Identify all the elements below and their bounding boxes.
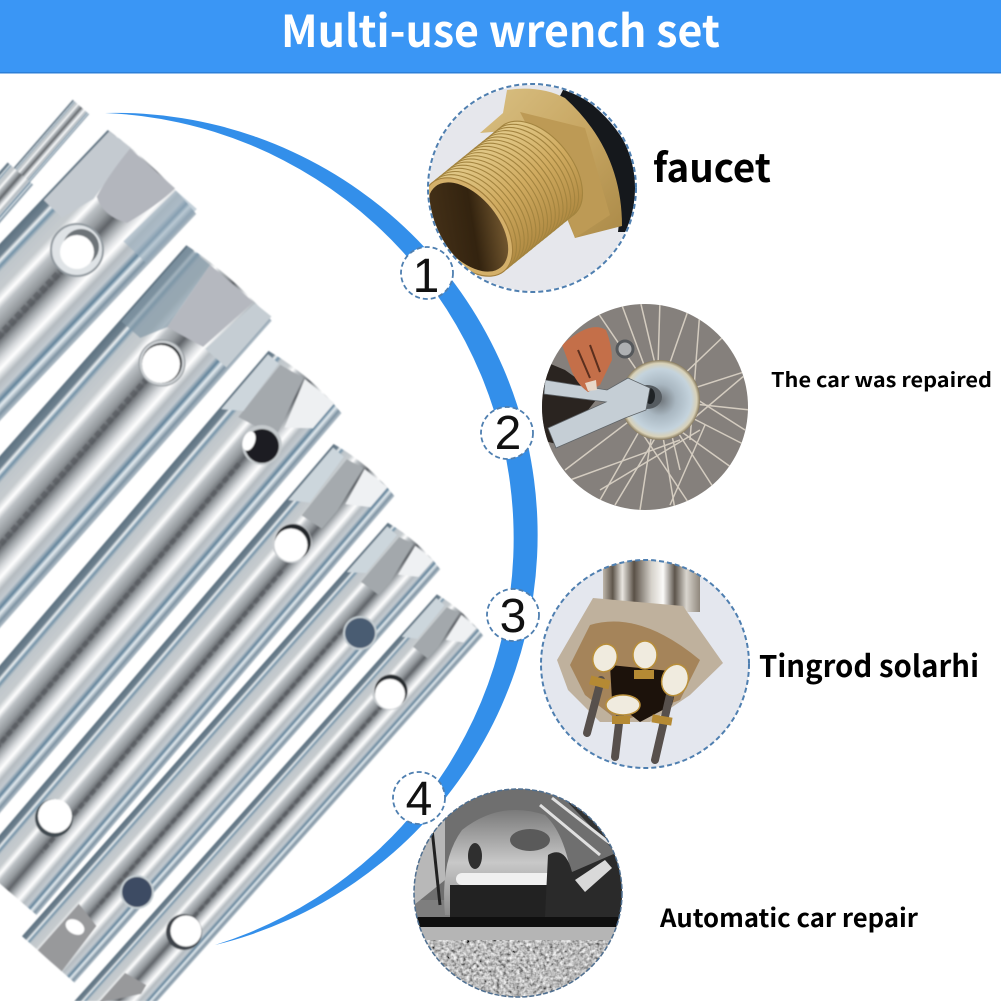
label: Tingrod solarhi: Tingrod solarhi — [759, 642, 979, 686]
badge 2: 2 — [495, 407, 521, 460]
photo: wheel repair — [541, 300, 750, 511]
gravel — [426, 940, 610, 997]
spokes — [565, 300, 750, 510]
wrench 5 upper hole — [343, 616, 377, 650]
car body — [444, 810, 575, 915]
brass nuts — [589, 670, 673, 726]
car repair photo ring — [414, 789, 622, 997]
blue arc connector — [105, 113, 538, 945]
hand — [562, 327, 612, 392]
badge 3 — [487, 589, 539, 643]
bumper — [456, 873, 548, 885]
label: Automatic car repair: Automatic car repair — [659, 899, 918, 935]
wrench 5 lower hole — [120, 875, 154, 909]
wrench 5 end hole — [63, 916, 87, 938]
washer — [617, 341, 633, 357]
rods — [587, 680, 670, 760]
photo: solar heating rod — [541, 556, 749, 768]
side window — [468, 843, 482, 869]
wrench 4 lower hole — [35, 799, 73, 837]
hex body facet — [520, 112, 610, 238]
label: faucet: faucet — [653, 138, 771, 194]
workshop backdrop — [413, 789, 623, 900]
worker — [545, 850, 623, 917]
title banner — [0, 0, 1001, 74]
wrench 2 hole — [139, 340, 185, 386]
wrench — [544, 378, 650, 448]
photo: automatic car repair — [413, 789, 623, 998]
steel cylinder — [603, 556, 700, 612]
badge 1 — [401, 247, 453, 303]
wrench 1 — [0, 127, 199, 432]
ceramic insulators — [589, 641, 693, 715]
rubber seal — [560, 90, 635, 232]
socket end bands — [44, 129, 137, 224]
wrench 5 — [22, 520, 443, 983]
flat socket face — [87, 147, 175, 235]
wrench 3 hole — [240, 425, 282, 465]
wrench 1 hole — [51, 224, 103, 276]
shadow area — [542, 364, 596, 444]
badge 4: 4 — [406, 773, 432, 826]
photo: faucet fitting — [429, 85, 635, 291]
hex body — [480, 89, 622, 238]
rust ring — [570, 622, 700, 722]
badge 2 — [481, 407, 533, 460]
wrench 4 — [0, 441, 397, 915]
hub — [620, 360, 700, 440]
wrench 6 lower hole — [166, 914, 202, 950]
floor bands — [413, 917, 623, 927]
hex flange — [557, 598, 723, 722]
wrench 3 — [0, 347, 344, 824]
faucet photo dashed ring — [428, 84, 636, 292]
heating rod photo dashed ring — [541, 560, 749, 768]
wrench set — [0, 95, 485, 1001]
dark centre — [610, 665, 680, 722]
car window — [510, 829, 550, 851]
threaded cylinder — [429, 120, 583, 277]
wrench 4 upper hole — [272, 523, 312, 563]
wrench 6 — [74, 592, 485, 1001]
badge 3: 3 — [500, 590, 526, 643]
badge 4 — [393, 772, 445, 826]
car underside — [450, 885, 547, 917]
wrench 2 — [0, 242, 274, 635]
wrench 0: small top-left tube — [0, 95, 92, 253]
badge 1: 1 — [413, 250, 439, 303]
label: The car was repaired: The car was repaired — [771, 364, 992, 393]
wrench 6 upper hole — [372, 674, 408, 710]
